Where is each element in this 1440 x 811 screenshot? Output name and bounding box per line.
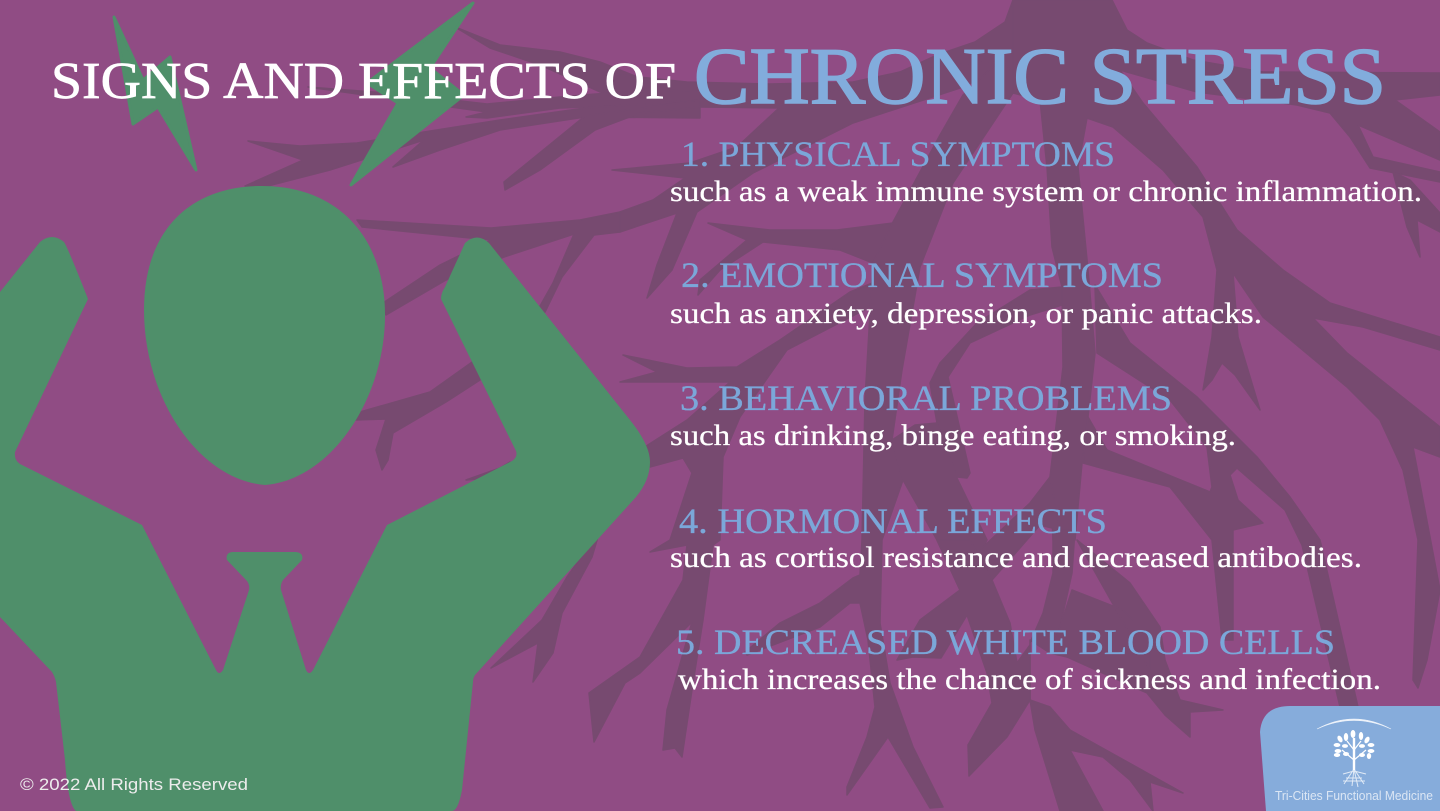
list item 2: such as anxiety, depression, or panic attacks.: [670, 297, 1262, 330]
logo arc: [1317, 719, 1391, 729]
title: [51, 33, 1386, 121]
list item 1: such as a weak immune system or chronic inflammation.: [670, 175, 1422, 208]
title line: chronic stress: CHRONIC STRESS: [694, 33, 1386, 121]
list item 1: [670, 134, 1422, 208]
copyright footer: © 2022 All Rights Reserved: [20, 775, 248, 794]
list item 3: 3. BEHAVIORAL PROBLEMS: [680, 378, 1172, 418]
icon: logo tree: [1334, 730, 1374, 787]
list item 5: [676, 622, 1381, 696]
list item 1: 1. PHYSICAL SYMPTOMS: [681, 134, 1115, 174]
list item 4: 4. HORMONAL EFFECTS: [679, 501, 1107, 541]
list item 2: 2. EMOTIONAL SYMPTOMS: [681, 255, 1163, 295]
icon: right lightning bolt: [351, 3, 473, 185]
title line: signs and effects of: SIGNS AND EFFECTS OF: [51, 53, 676, 110]
list item 2: [670, 255, 1262, 330]
list item 4: such as cortisol resistance and decreased antibodies.: [670, 541, 1362, 574]
icon: left lightning bolt: [114, 17, 196, 170]
logo background: [1260, 706, 1440, 811]
figure: stressed person silhouette: [0, 3, 650, 811]
list item 5: which increases the chance of sickness and infection.: [678, 663, 1381, 696]
body with raised arms and tie: [0, 237, 650, 811]
list item 4: [670, 501, 1362, 574]
list item 5: 5. DECREASED WHITE BLOOD CELLS: [676, 622, 1335, 662]
list item 3: [670, 378, 1236, 452]
head: [144, 186, 385, 485]
logo panel: [1260, 706, 1440, 811]
list item 3: such as drinking, binge eating, or smoking.: [670, 419, 1236, 452]
